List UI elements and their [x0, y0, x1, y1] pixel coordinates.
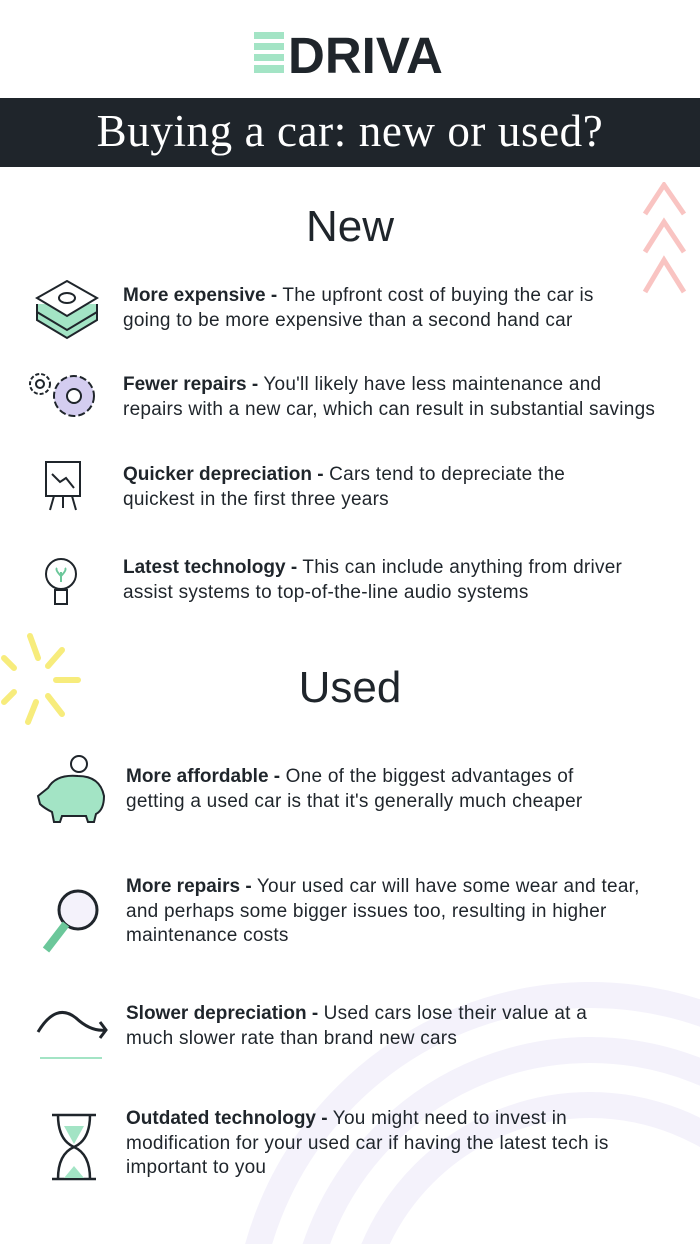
icon: magnifier: [42, 890, 98, 952]
item: quicker depreciation: [123, 464, 565, 510]
item: slower depreciation: Slower depreciation - Used cars lose their value at a: [126, 1003, 587, 1024]
item: fewer repairs: repairs with a new car, which can result in substantial savings: [123, 398, 655, 420]
item: latest technology: [123, 557, 622, 602]
decorative sun: [1, 633, 81, 725]
icon: lightbulb: [45, 558, 77, 605]
item: quicker depreciation: quickest in the first three years: [123, 488, 389, 510]
icon: chart board: [45, 461, 81, 510]
item: more expensive: More expensive - The upfront cost of buying the car is: [123, 285, 594, 306]
item: more affordable: [126, 766, 582, 812]
icon: money stack: [35, 280, 99, 340]
title bar: Buying a car: new or used?: [97, 106, 603, 156]
item: outdated technology: important to you: [126, 1157, 266, 1178]
item: fewer repairs: [123, 374, 655, 420]
logo: DRIVA: [288, 27, 443, 84]
item: more expensive: [123, 285, 594, 330]
item: more repairs: maintenance costs: [126, 925, 289, 946]
item: more expensive: going to be more expensive than a second hand car: [123, 310, 573, 330]
icon: gears: [29, 373, 95, 417]
decorative chevrons: [643, 182, 686, 294]
item: quicker depreciation: Quicker depreciation - Cars tend to depreciate the: [123, 464, 565, 485]
item: more affordable: getting a used car is that it's generally much cheaper: [126, 790, 582, 812]
item: slower depreciation: [126, 1003, 587, 1048]
item: more repairs: More repairs - Your used car will have some wear and tear,: [126, 876, 640, 897]
item: latest technology: Latest technology - This can include anything from driver: [123, 557, 622, 578]
item: latest technology: assist systems to top-of-the-line audio systems: [123, 582, 529, 602]
item: fewer repairs: Fewer repairs - You'll likely have less maintenance and: [123, 374, 601, 395]
icon: piggy bank: [36, 755, 105, 823]
heading: Used: Used: [299, 663, 401, 712]
title bar: [0, 98, 700, 167]
item: more affordable: More affordable - One of the biggest advantages of: [126, 766, 574, 787]
item: outdated technology: Outdated technology - You might need to invest in: [126, 1108, 567, 1129]
item: outdated technology: [126, 1108, 609, 1178]
icon: hourglass: [52, 1114, 96, 1180]
heading: New: New: [306, 202, 394, 251]
icon: curve arrow: [36, 1010, 108, 1059]
item: more repairs: [126, 876, 640, 946]
item: more repairs: and perhaps some bigger issues too, resulting in higher: [126, 900, 607, 922]
item: slower depreciation: much slower rate than brand new cars: [126, 1028, 457, 1048]
item: outdated technology: modification for your used car if having the latest tech is: [126, 1132, 609, 1154]
